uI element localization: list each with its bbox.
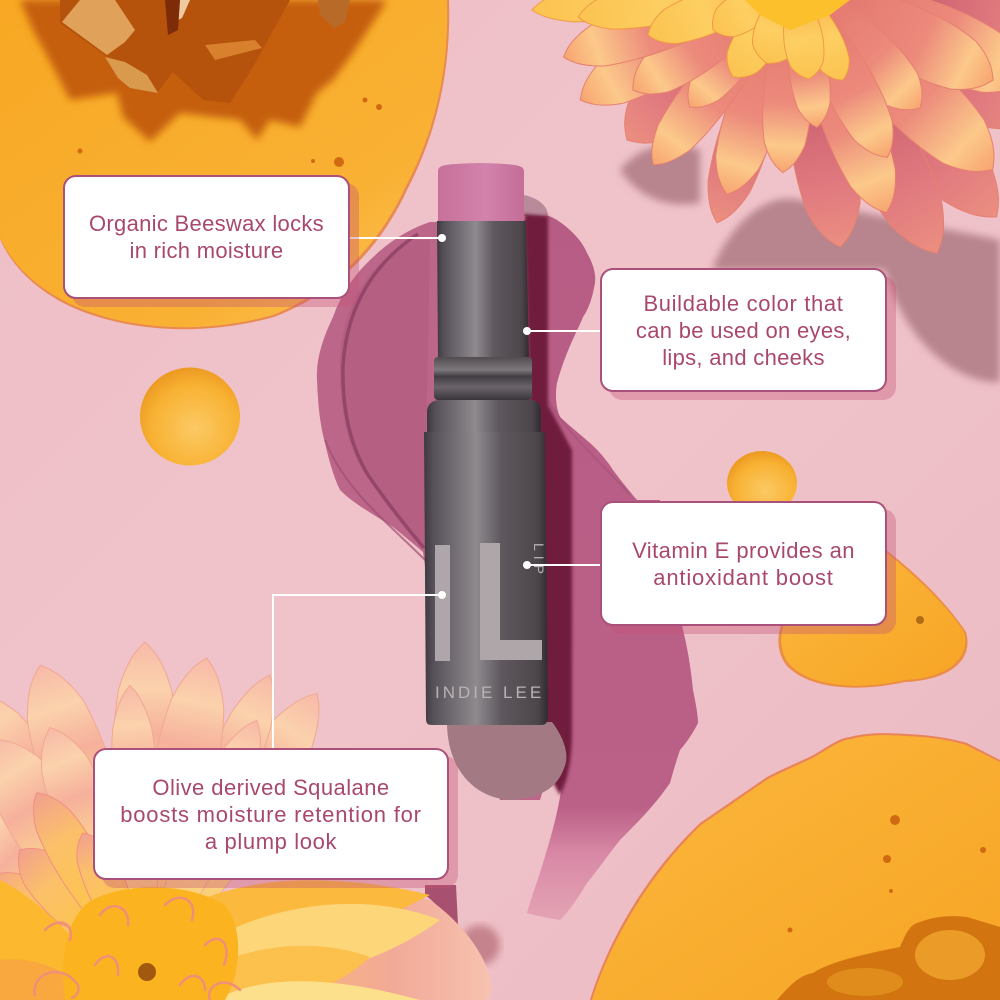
- callout: vitamin E: Vitamin E provides an: [632, 538, 855, 562]
- connector lines: [273, 238, 602, 750]
- connector dots: [438, 234, 531, 599]
- flower bottom left: [0, 642, 492, 1000]
- shadow under honeycomb: [20, 0, 386, 142]
- smear tip under olive card: [425, 885, 458, 925]
- lipstick shadows: [447, 195, 572, 800]
- callout: organic beeswax: Organic Beeswax locks: [89, 211, 324, 236]
- honey puddle top left: [0, 0, 449, 329]
- vertical label: LIP: [531, 543, 547, 579]
- logo text: INDIE LEE: [435, 683, 544, 702]
- callout: organic beeswax: in rich moisture: [130, 238, 283, 263]
- callout: olive squalane: Olive derived Squalane: [152, 774, 390, 800]
- lower left petals: [0, 880, 95, 975]
- large right petals: [170, 880, 492, 1000]
- outer case: [424, 432, 548, 725]
- honey droplet left: [140, 368, 240, 466]
- callout: olive squalane: a plump look: [205, 828, 337, 854]
- lipstick bullet: [438, 163, 524, 225]
- callout: buildable color: [600, 268, 887, 392]
- callout: buildable color: can be used on eyes,: [636, 318, 851, 342]
- icon: honeycomb top left: [60, 0, 350, 103]
- inner yellow petals: [529, 0, 859, 88]
- second ring petals: [566, 0, 1000, 223]
- outer petals: [564, 0, 1000, 269]
- callout: olive squalane: boosts moisture retention for: [120, 802, 422, 826]
- icon: honeycomb bottom right: [777, 916, 1000, 1000]
- outer petals: [0, 642, 341, 1000]
- lipstick product: [424, 163, 548, 725]
- case upper: [427, 400, 541, 432]
- callout: buildable color: lips, and cheeks: [662, 344, 825, 370]
- logo mark: [435, 543, 542, 661]
- second ring petals: [0, 684, 278, 1000]
- flower top right: [529, 0, 1000, 269]
- flower center: [63, 887, 238, 1000]
- honey droplet right: [727, 451, 797, 515]
- honey drops on top-left puddle: [78, 98, 382, 167]
- callout: vitamin E: [600, 501, 887, 626]
- third ring petals: [555, 0, 1000, 169]
- collar: [434, 357, 532, 400]
- inner tube: [437, 221, 529, 358]
- left yellow petals with pink tips: [0, 781, 165, 1000]
- shadow of bottom flower: [460, 925, 500, 965]
- callout: olive squalane: [93, 748, 449, 880]
- callout: buildable color: Buildable color that: [643, 290, 844, 316]
- callout: vitamin E: antioxidant boost: [653, 564, 834, 590]
- shadow of top right flower: [620, 145, 1000, 382]
- honey puddle right: [778, 550, 968, 688]
- pink lipstick smear: [317, 212, 698, 920]
- center curled petals: [34, 898, 240, 1000]
- callout: organic beeswax: [63, 175, 350, 299]
- honey puddle bottom right: [590, 733, 1000, 1000]
